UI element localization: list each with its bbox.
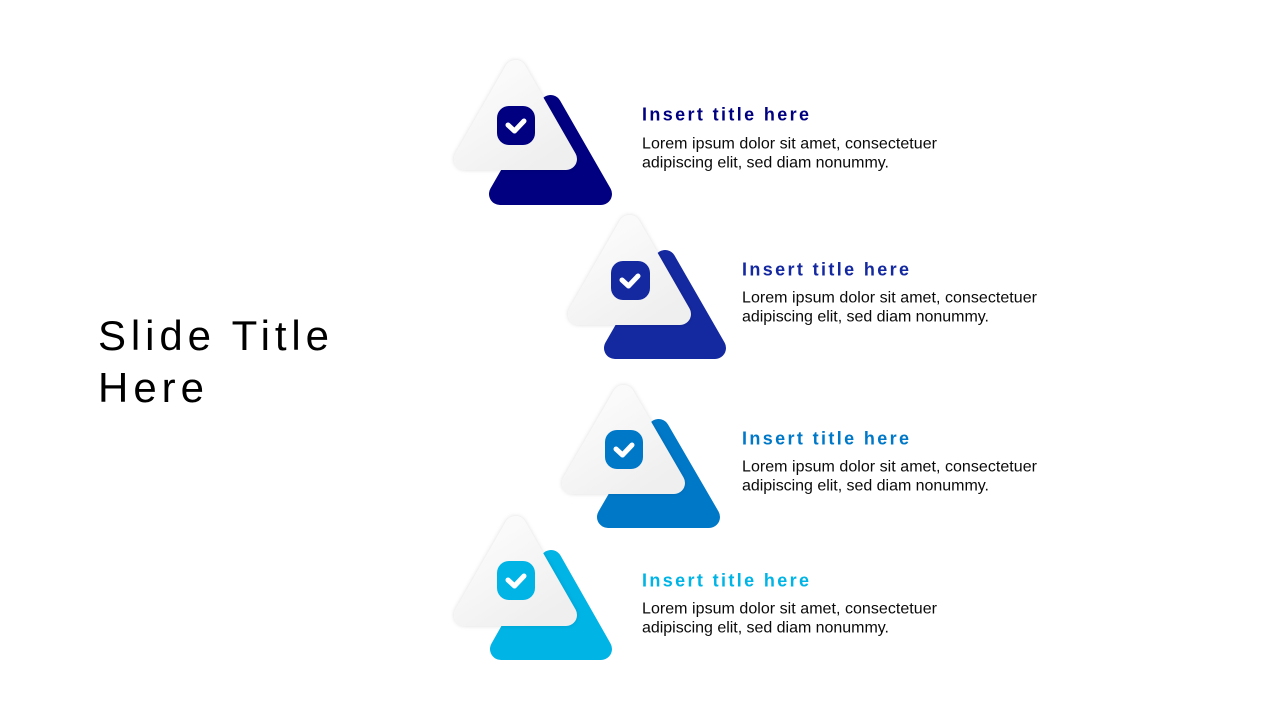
icon: white front triangle xyxy=(579,226,680,314)
slide title: Here xyxy=(98,364,204,411)
item 2 heading: Insert title here xyxy=(742,260,909,280)
item 2 body xyxy=(742,290,1038,326)
item 1 body: Lorem ipsum dolor sit amet, consectetuer xyxy=(642,136,938,152)
icon: white front triangle xyxy=(573,396,674,483)
item 4 body: adipiscing elit, sed diam nonummy. xyxy=(642,620,889,636)
icon: check badge xyxy=(611,261,650,300)
item 1 xyxy=(465,71,938,194)
item 2 body: adipiscing elit, sed diam nonummy. xyxy=(742,308,989,326)
icon: navy back triangle xyxy=(500,106,601,194)
item 3 body xyxy=(742,458,1038,494)
item 1 body: adipiscing elit, sed diam nonummy. xyxy=(642,154,889,172)
item 4 body xyxy=(642,600,938,636)
slide title xyxy=(98,312,329,411)
icon: cyan back triangle xyxy=(501,561,601,649)
item 2 xyxy=(579,226,1038,348)
icon: check badge xyxy=(497,106,535,145)
icon: mid-blue back triangle xyxy=(608,430,709,517)
item 2 body: Lorem ipsum dolor sit amet, consectetuer xyxy=(742,290,1038,306)
item 3 body: adipiscing elit, sed diam nonummy. xyxy=(742,478,989,494)
slide title: Slide Title xyxy=(98,312,329,359)
item 1 heading: Insert title here xyxy=(642,104,809,124)
item 3 xyxy=(573,396,1038,517)
item 4 heading: Insert title here xyxy=(642,570,809,590)
item 3 heading: Insert title here xyxy=(742,428,909,448)
icon: check badge xyxy=(497,561,535,600)
icon: white front triangle xyxy=(465,527,566,615)
item 4 body: Lorem ipsum dolor sit amet, consectetuer xyxy=(642,600,938,618)
item 3 body: Lorem ipsum dolor sit amet, consectetuer xyxy=(742,458,1038,476)
icon: white front triangle xyxy=(465,71,566,159)
item 4 xyxy=(465,527,938,649)
icon: check badge xyxy=(605,430,643,469)
item 1 body xyxy=(642,136,938,172)
icon: blue back triangle xyxy=(615,261,715,348)
